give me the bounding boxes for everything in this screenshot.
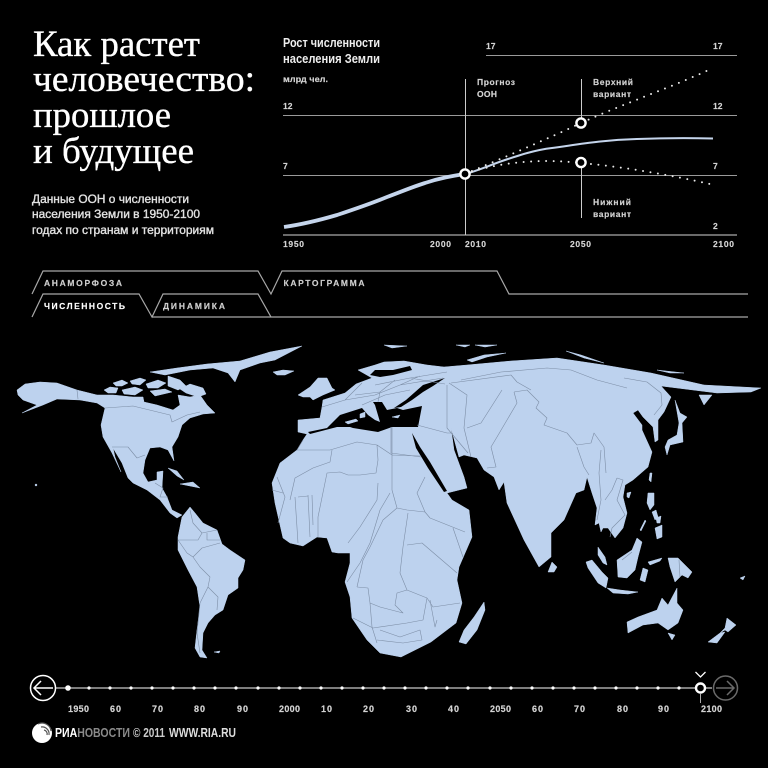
axis values	[283, 41, 734, 249]
logo and copyright	[32, 723, 236, 743]
subtitle text block: населения Земли в 1950-2100	[32, 209, 200, 221]
year labels: 30	[406, 704, 417, 714]
forecast annotations: Прогноз	[477, 77, 515, 87]
axis values: 7	[283, 161, 288, 171]
country borders	[272, 427, 465, 643]
forecast annotations: Верхний	[593, 77, 633, 87]
icon: back arrow	[30, 676, 56, 700]
title: человечество:	[33, 59, 255, 100]
icon: RIA globe	[32, 723, 52, 743]
timeline slider	[30, 672, 738, 714]
title: Как растет	[33, 24, 200, 65]
year labels: 60	[110, 704, 121, 714]
axis values: 17	[486, 41, 496, 51]
axis values: 7	[713, 161, 718, 171]
logo and copyright: © 2011	[133, 725, 165, 740]
year labels: 10	[321, 704, 332, 714]
year labels: 70	[574, 704, 585, 714]
axis values: 2000	[430, 239, 451, 249]
navigation tabs: ЧИСЛЕННОСТЬ	[44, 301, 125, 311]
chart unit: млрд чел.	[283, 74, 328, 84]
year labels: 70	[152, 704, 163, 714]
chart heading	[283, 36, 380, 66]
world map cartogram	[17, 345, 761, 658]
islands of Asia and Oceania	[298, 345, 745, 644]
year labels: 60	[532, 704, 543, 714]
subtitle text block: годах по странам и территориям	[32, 225, 214, 237]
South America	[178, 507, 245, 658]
subtitle text block	[32, 194, 214, 237]
navigation tabs: АНАМОРФОЗА	[44, 278, 122, 288]
axis values: 2100	[713, 239, 734, 249]
dotted forecast variants	[465, 68, 713, 184]
North America	[17, 382, 215, 518]
axis values: 2	[713, 221, 718, 231]
year labels: 90	[658, 704, 669, 714]
year labels: 20	[363, 704, 374, 714]
year labels: 40	[448, 704, 459, 714]
axis values: 12	[283, 101, 293, 111]
axis values: 1950	[283, 239, 304, 249]
Arctic islands and Greenland	[35, 346, 302, 488]
year labels: 2050	[490, 704, 511, 714]
logo and copyright: WWW.RIA.RU	[169, 725, 236, 740]
year labels	[68, 704, 722, 714]
icon: forward arrow	[714, 676, 738, 700]
forecast annotations: вариант	[593, 209, 631, 219]
forecast annotations: ООН	[477, 89, 497, 99]
title: и будущее	[33, 131, 194, 172]
year labels: 80	[617, 704, 628, 714]
marker circles	[460, 118, 586, 179]
axis values: 12	[713, 101, 723, 111]
title: прошлое	[33, 95, 171, 136]
line chart: population growth	[283, 36, 737, 249]
year labels: 2100	[701, 704, 722, 714]
navigation tabs	[32, 271, 748, 317]
logo and copyright: РИАНОВОСТИ	[55, 725, 130, 740]
year labels: 1950	[68, 704, 89, 714]
forecast annotations	[477, 77, 633, 219]
navigation tabs: КАРТОГРАММА	[284, 278, 364, 288]
forecast annotations: Нижний	[593, 197, 631, 207]
axis values: 2050	[570, 239, 591, 249]
title	[33, 24, 255, 172]
Europe, Africa and Asia	[272, 358, 761, 657]
main population curve	[284, 138, 713, 227]
subtitle text block: Данные ООН о численности	[32, 194, 189, 206]
seas	[308, 366, 447, 492]
axis values: 17	[713, 41, 723, 51]
forecast annotations: вариант	[593, 89, 631, 99]
slider handle	[696, 672, 706, 703]
year labels: 80	[194, 704, 205, 714]
navigation tabs: ДИНАМИКА	[163, 301, 225, 311]
chart heading: Рост численности	[283, 36, 380, 50]
chart heading: населения Земли	[283, 52, 380, 66]
axis values: 2010	[465, 239, 486, 249]
year labels: 2000	[279, 704, 300, 714]
year labels: 90	[237, 704, 248, 714]
year ticks	[65, 685, 681, 691]
